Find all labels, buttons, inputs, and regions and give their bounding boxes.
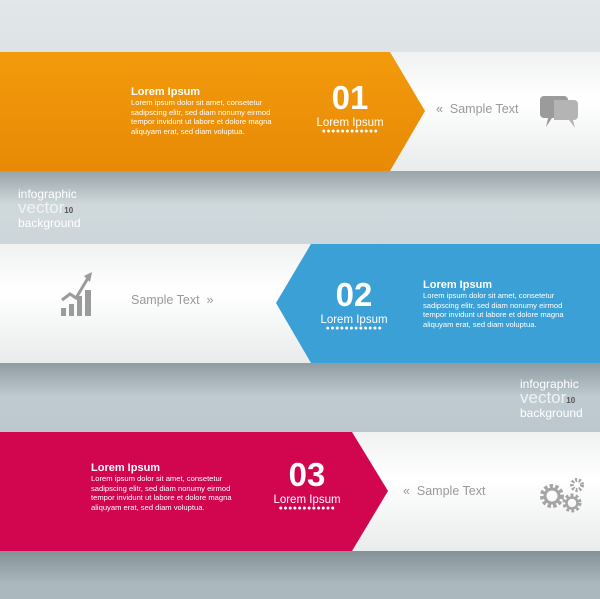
shadow under band 1: [0, 171, 600, 205]
watermark 2: [520, 377, 583, 420]
sample text 1: « Sample Text: [436, 102, 518, 116]
number 03: ●●●●●●●●●●●●: [279, 505, 335, 512]
watermark 2: background: [520, 406, 583, 420]
watermark 1: [18, 187, 81, 230]
text block 2: aliquyam erat, sed diam voluptua.: [423, 320, 537, 329]
panel: band 2: [0, 244, 600, 363]
shadow under band 2: [0, 363, 600, 397]
text block 2: tempor invidunt ut labore et dolore magna: [423, 310, 564, 319]
number 01: [316, 79, 384, 135]
number 01: 01: [332, 79, 368, 116]
icon: gears: [540, 478, 584, 512]
shadow under band 3: [0, 551, 600, 585]
number 01: ●●●●●●●●●●●●: [322, 128, 378, 135]
icon: speech bubbles: [540, 96, 578, 128]
text block 1: sadipscing elitr, sed diam nonumy eirmod: [131, 108, 270, 117]
orange arrow: [0, 52, 425, 171]
blue arrow: [276, 244, 600, 363]
sample text 3: « Sample Text: [403, 484, 485, 498]
watermark 1: vector10: [18, 198, 73, 217]
text block 3: Lorem ipsum dolor sit amet, consetetur: [91, 474, 222, 483]
text block 1: aliquyam erat, sed diam voluptua.: [131, 127, 245, 136]
text block 2: Lorem Ipsum: [423, 279, 492, 291]
panel: band 1: [0, 52, 600, 171]
watermark 1: background: [18, 216, 81, 230]
sample text 2: Sample Text »: [131, 293, 213, 307]
number 02: Lorem Ipsum: [320, 314, 388, 326]
number 03: Lorem Ipsum: [273, 494, 341, 506]
number 01: Lorem Ipsum: [316, 117, 384, 129]
magenta arrow: [0, 432, 388, 551]
text block 2: Lorem ipsum dolor sit amet, consetetur: [423, 291, 554, 300]
text block 2: sadipscing elitr, sed diam nonumy eirmod: [423, 301, 562, 310]
text block 3: sadipscing elitr, sed diam nonumy eirmod: [91, 484, 230, 493]
icon: growth chart: [61, 272, 92, 316]
watermark 1: infographic: [18, 187, 77, 201]
panel: band 3: [0, 432, 600, 551]
number 02: [320, 276, 388, 332]
number 02: ●●●●●●●●●●●●: [326, 325, 382, 332]
text block 1: Lorem Ipsum: [131, 86, 200, 98]
text block 3: tempor invidunt ut labore et dolore magna: [91, 493, 232, 502]
text block 3: [91, 462, 232, 512]
watermark 2: vector10: [520, 388, 575, 407]
text block 3: aliquyam erat, sed diam voluptua.: [91, 503, 205, 512]
number 03: [273, 456, 341, 512]
text block 2: [423, 279, 564, 329]
watermark 2: infographic: [520, 377, 579, 391]
number 02: 02: [336, 276, 372, 313]
text block 1: Lorem ipsum dolor sit amet, consetetur: [131, 98, 262, 107]
number 03: 03: [289, 456, 325, 493]
text block 3: Lorem Ipsum: [91, 462, 160, 474]
text block 1: [131, 86, 272, 136]
text block 1: tempor invidunt ut labore et dolore magna: [131, 117, 272, 126]
